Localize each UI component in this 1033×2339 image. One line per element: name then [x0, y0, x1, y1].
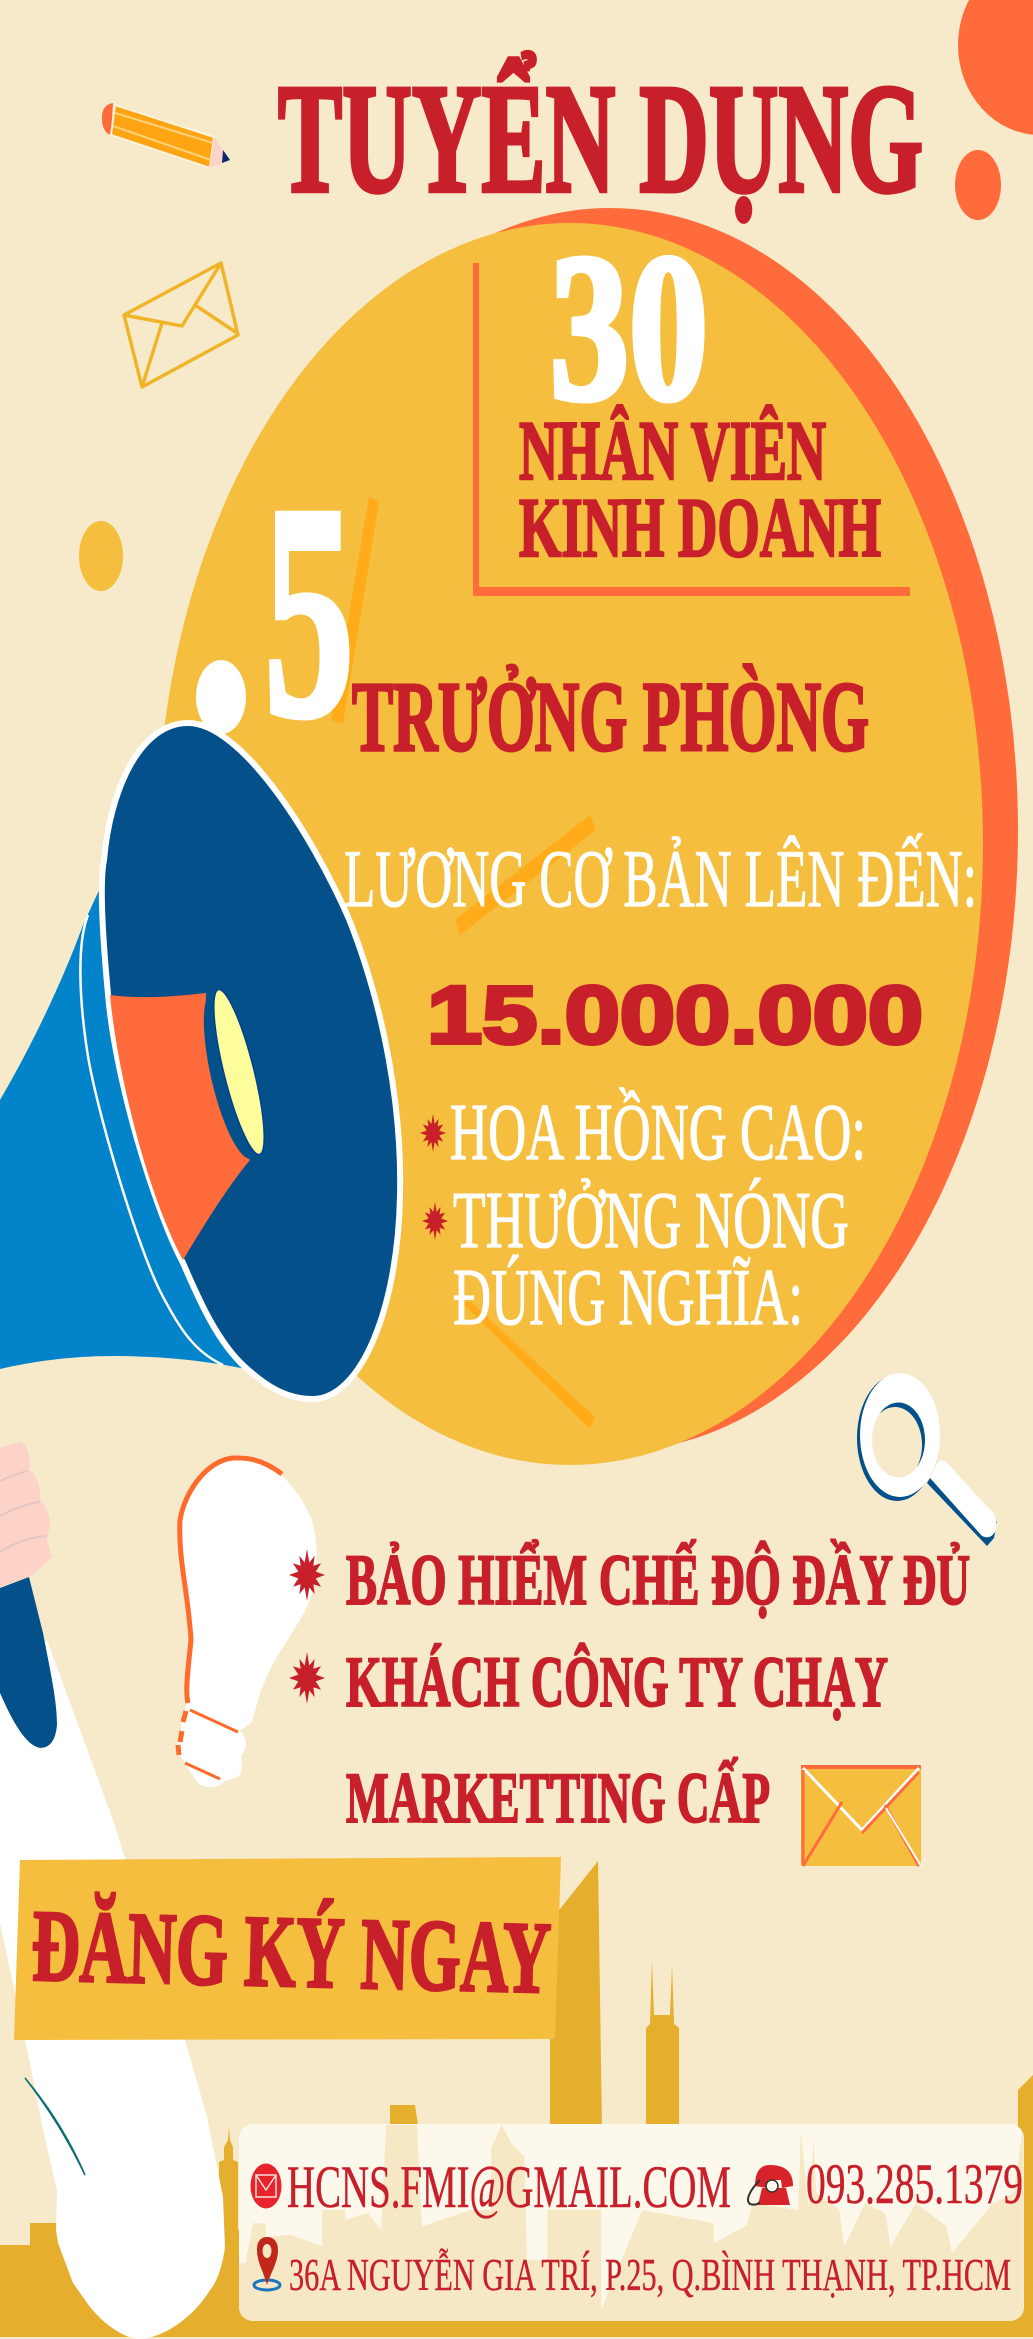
skyline — [0, 1861, 1033, 2337]
text: bonus line 2: ĐÚNG NGHĨA: — [453, 1254, 803, 1342]
accent slash behind salary — [455, 815, 596, 935]
panel: contact — [238, 2124, 1024, 2323]
icon: star bullet bonus — [422, 1202, 448, 1240]
megaphone inner shadow — [192, 986, 272, 1164]
text: marketing: MARKETTING CẤP — [346, 1757, 770, 1838]
icon: star bullet commission — [420, 1114, 446, 1152]
frame vertical bar — [473, 263, 479, 596]
hand — [0, 1442, 52, 1587]
icon: light bulb — [176, 1455, 317, 1787]
sleeve — [0, 1577, 57, 1748]
megaphone inner light — [204, 986, 274, 1158]
text: email: HCNS.FMI@GMAIL.COM — [287, 2154, 731, 2220]
icon: magnifier — [857, 1373, 997, 1546]
icon: filled envelope — [801, 1767, 921, 1866]
icon: phone — [748, 2165, 793, 2205]
number: 30: 30 — [550, 212, 708, 444]
list: benefits — [289, 1539, 970, 1838]
icon: email — [250, 2164, 282, 2208]
decorative circle: yellow — [79, 521, 123, 591]
text: register now: ĐĂNG KÝ NGAY — [31, 1890, 552, 2015]
decorative circle: large orange top right — [958, 0, 1033, 135]
icon: pencil — [102, 103, 230, 168]
decorative circle: small orange — [955, 150, 1001, 220]
decorative circle: white — [196, 660, 246, 734]
megaphone body — [0, 886, 260, 1370]
icon: star bullet insurance — [289, 1549, 325, 1601]
number: 5: 5 — [264, 442, 354, 780]
icon: star bullet customers — [289, 1652, 325, 1704]
megaphone mouth — [102, 723, 400, 1399]
heading: nhân viên: NHÂN VIÊN — [519, 404, 826, 498]
megaphone throat — [110, 993, 250, 1260]
panel: orange ellipse shadow — [202, 208, 1018, 1452]
panel: yellow ellipse — [157, 223, 983, 1465]
text: bonus line 1: THƯỞNG NÓNG — [453, 1177, 849, 1265]
icon: outline envelope — [124, 263, 238, 387]
accent slash below bonus — [461, 1302, 595, 1429]
megaphone rim line — [80, 915, 223, 1365]
accent slash behind 5 — [331, 497, 379, 724]
frame horizontal bar — [473, 587, 910, 596]
icon: megaphone — [0, 723, 400, 1399]
arm holding megaphone — [0, 1640, 225, 2339]
banner: register now — [14, 1857, 561, 2040]
number: salary amount: 15.000.000 — [427, 970, 923, 1061]
icon: map pin — [254, 2237, 280, 2290]
sleeve crease line — [25, 2078, 85, 2175]
